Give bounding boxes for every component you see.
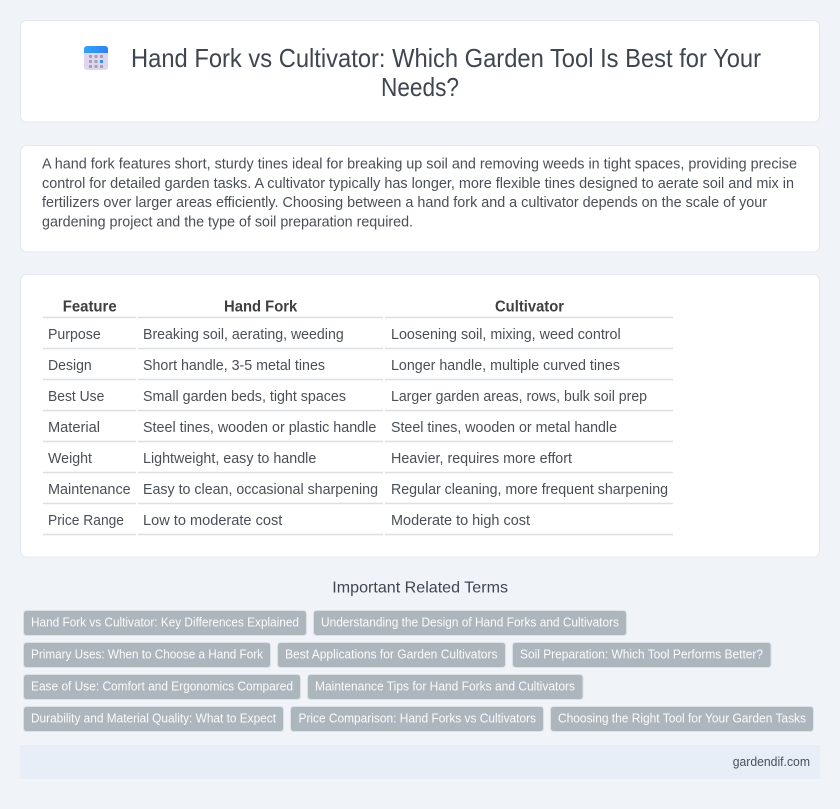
header panel (20, 20, 820, 122)
row: maintenance: Regular cleaning, more frequent sharpening (391, 482, 668, 498)
row: purpose: Purpose (48, 327, 101, 343)
intro text: fertilizers over larger areas efficiently. Choosing between a hand fork and a cultivator depends on the scale of your (42, 195, 767, 211)
intro text: A hand fork features short, sturdy tines ideal for breaking up soil and removing weeds in tight spaces, providing precise (42, 156, 797, 172)
tag (290, 706, 544, 732)
row: best use: Larger garden areas, rows, bulk soil prep (391, 389, 647, 405)
row: weight: Heavier, requires more effort (391, 451, 572, 467)
row: weight: Weight (48, 451, 92, 467)
row: design: Longer handle, multiple curved tines (391, 358, 620, 374)
tag (24, 706, 284, 732)
tag: Ease of Use: Comfort and Ergonomics Compared (31, 679, 293, 694)
row: material: Steel tines, wooden or metal handle (391, 420, 617, 436)
table header: Feature (63, 299, 117, 316)
tag (314, 610, 626, 636)
tag (278, 642, 506, 668)
tag (512, 642, 771, 668)
icon: calendar (84, 46, 108, 70)
tag: Primary Uses: When to Choose a Hand Fork (31, 647, 264, 662)
row: design: Design (48, 358, 92, 374)
footer (20, 745, 820, 779)
related terms heading: Important Related Terms (332, 580, 508, 597)
row: purpose: Loosening soil, mixing, weed control (391, 327, 621, 343)
tag: Durability and Material Quality: What to Expect (31, 711, 276, 726)
tag: Soil Preparation: Which Tool Performs Better? (520, 647, 763, 662)
tag (24, 674, 300, 700)
row: best use: Small garden beds, tight spaces (143, 389, 346, 405)
row: weight (48, 451, 572, 467)
tag (550, 706, 814, 732)
intro text (42, 156, 797, 230)
row: purpose (48, 327, 621, 343)
tag (24, 610, 306, 636)
row: price range: Moderate to high cost (391, 513, 530, 529)
table header: Hand Fork (224, 299, 297, 316)
title: Needs? (381, 74, 459, 102)
row: purpose: Breaking soil, aerating, weeding (143, 327, 344, 343)
table header (63, 299, 564, 316)
row: material (48, 420, 617, 436)
intro text: control for detailed garden tasks. A cultivator typically has longer, more flexible tines designed to aerate soil and mix in (42, 176, 794, 192)
table panel (20, 274, 820, 557)
row: price range (48, 513, 530, 529)
footer source: gardendif.com (733, 754, 810, 769)
title (131, 45, 761, 102)
tag: Hand Fork vs Cultivator: Key Differences Explained (31, 615, 299, 630)
row: price range: Price Range (48, 513, 124, 529)
tag (308, 674, 583, 700)
table header: Cultivator (495, 299, 564, 316)
row: best use (48, 389, 647, 405)
tag: Understanding the Design of Hand Forks and Cultivators (321, 615, 619, 630)
row: best use: Best Use (48, 389, 104, 405)
tag: Choosing the Right Tool for Your Garden Tasks (558, 711, 806, 726)
row: price range: Low to moderate cost (143, 513, 282, 529)
title: Hand Fork vs Cultivator: Which Garden Tool Is Best for Your (131, 45, 761, 73)
row: maintenance: Easy to clean, occasional sharpening (143, 482, 378, 498)
tag: Price Comparison: Hand Forks vs Cultivators (298, 711, 536, 726)
row: design: Short handle, 3-5 metal tines (143, 358, 325, 374)
tag: Best Applications for Garden Cultivators (285, 647, 498, 662)
row: design (48, 358, 620, 374)
intro text: gardening project and the type of soil preparation required. (42, 214, 413, 230)
intro panel (20, 146, 820, 252)
tag: Maintenance Tips for Hand Forks and Cultivators (315, 679, 575, 694)
related terms tags (24, 610, 814, 732)
row: weight: Lightweight, easy to handle (143, 451, 316, 467)
row: maintenance (48, 482, 668, 498)
row: material: Steel tines, wooden or plastic handle (143, 420, 376, 436)
row: material: Material (48, 420, 100, 436)
row: maintenance: Maintenance (48, 482, 131, 498)
tag (24, 642, 270, 668)
